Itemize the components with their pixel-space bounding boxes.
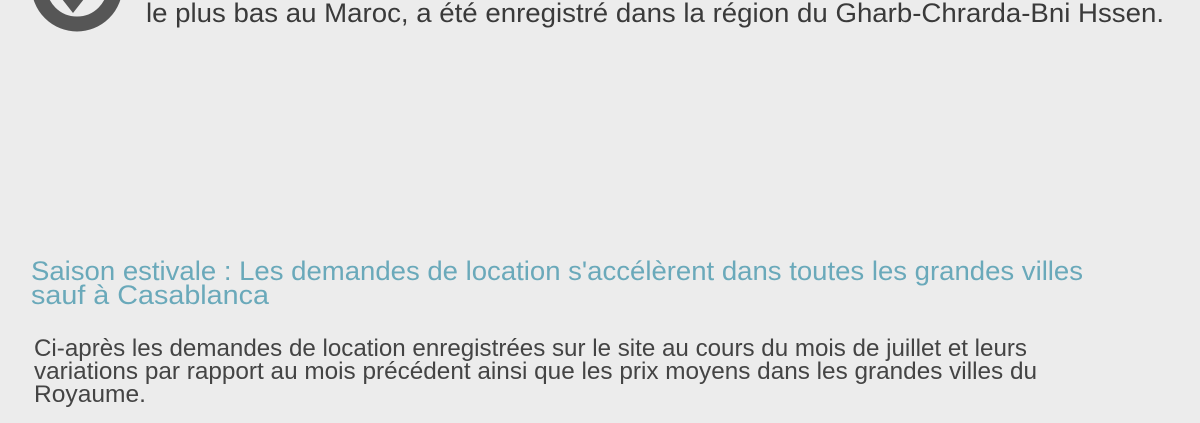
icon: location ring with heart xyxy=(39,0,115,24)
heading: summer season: Saison estivale : Les demandes de location s'accélèrent dans toutes les grandes villes xyxy=(31,256,1083,286)
heading: summer season: sauf à Casablanca xyxy=(31,280,269,310)
text block: rental demand introduction: variations par rapport au mois précédent ainsi que les prix moyens dans les grandes villes du xyxy=(34,358,1037,385)
text block: rental demand introduction: Royaume. xyxy=(34,381,146,408)
text block: rental demand introduction xyxy=(34,335,1037,408)
heading: summer season xyxy=(31,256,1083,310)
text block: rental demand introduction: Ci-après les demandes de location enregistrées sur le site au cours du mois de juillet et leurs xyxy=(34,335,1027,362)
